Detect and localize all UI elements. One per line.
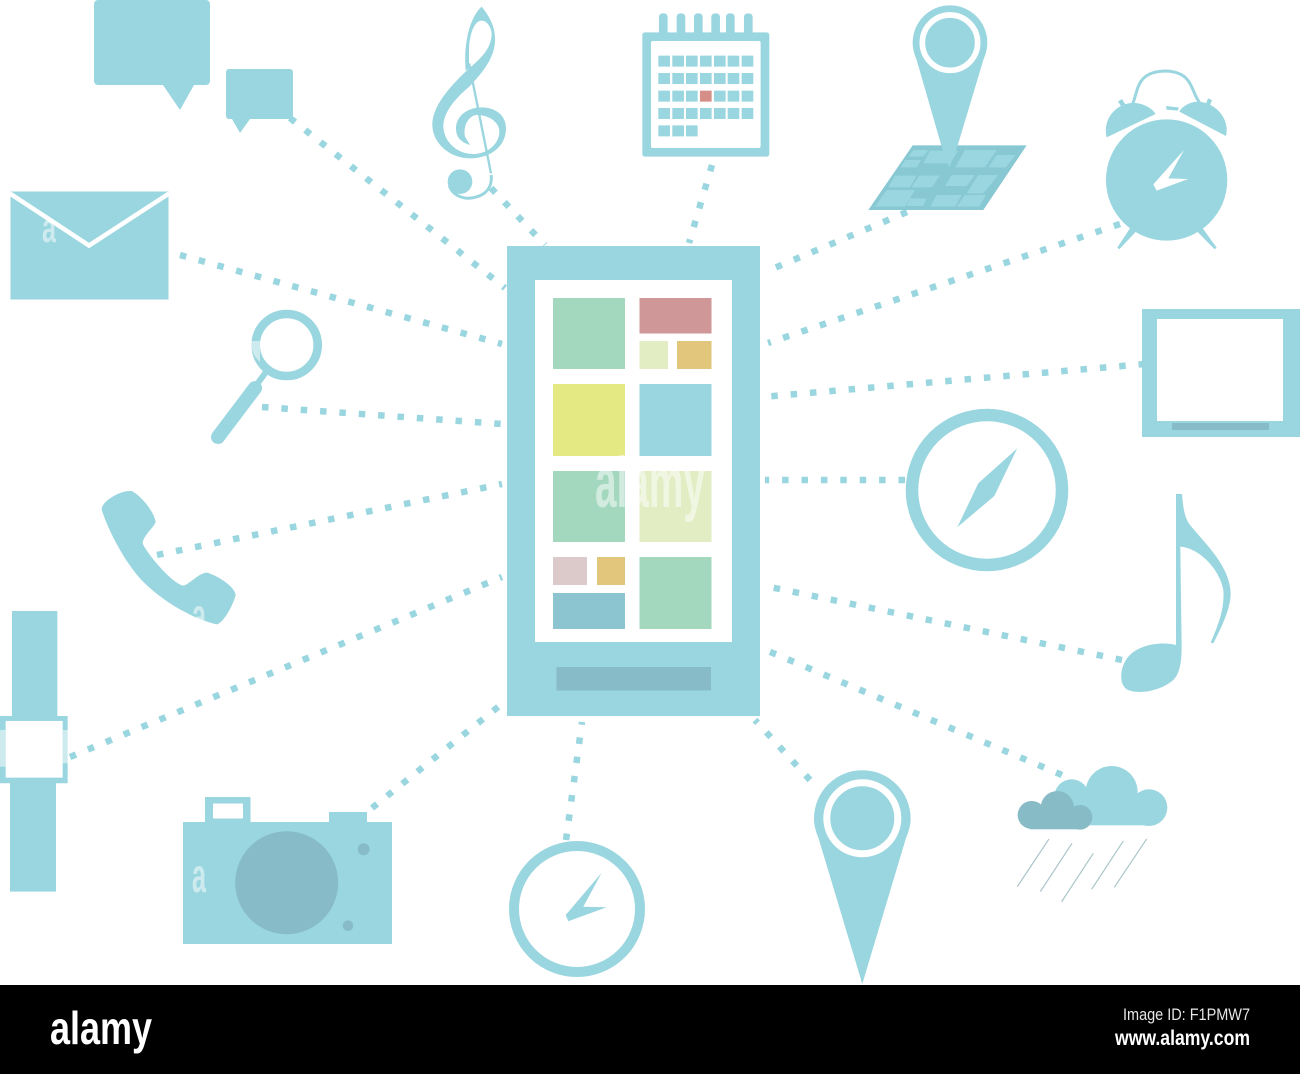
- app tiles: [553, 298, 712, 629]
- icon: camera: [183, 797, 392, 944]
- watermarks: alamy: [595, 444, 705, 523]
- icon: tablet: [1142, 309, 1300, 437]
- watermarks: [42, 204, 705, 903]
- icon: wall clock: [514, 846, 640, 972]
- icon: map with location pin: [868, 5, 1027, 210]
- large cloud: [1054, 766, 1167, 826]
- icon: telephone handset: [102, 491, 236, 624]
- icon: treble clef: [432, 7, 506, 198]
- location pin: [913, 5, 987, 168]
- small dark cloud: [1018, 791, 1092, 830]
- watermarks: a: [192, 590, 206, 643]
- icon: speech bubbles: [94, 0, 293, 133]
- footer logo: alamy: [50, 1002, 152, 1054]
- footer bar: [0, 985, 1300, 1074]
- icon: location pin large: [814, 770, 911, 984]
- icon: calendar: [642, 13, 769, 157]
- phone screen: [535, 280, 732, 642]
- icon: envelope: [10, 192, 169, 300]
- icon: rain cloud: [1017, 766, 1167, 902]
- icon: wristwatch: [0, 611, 69, 892]
- watermarks: a: [42, 204, 56, 251]
- image id: Image ID: F1PMW7: [1123, 1005, 1250, 1024]
- dotted connector lines: [70, 118, 1145, 840]
- icon: musical note: [1121, 494, 1231, 692]
- home bar: [556, 667, 711, 690]
- icon: compass: [912, 415, 1062, 565]
- smartphone: [507, 246, 760, 716]
- rain strokes: [1017, 839, 1147, 902]
- watermarks: a: [192, 850, 206, 903]
- icon: alarm clock: [1106, 71, 1227, 249]
- map sheet: [868, 145, 1027, 210]
- icon: magnifying glass: [218, 314, 318, 437]
- website: www.alamy.com: [1114, 1027, 1250, 1050]
